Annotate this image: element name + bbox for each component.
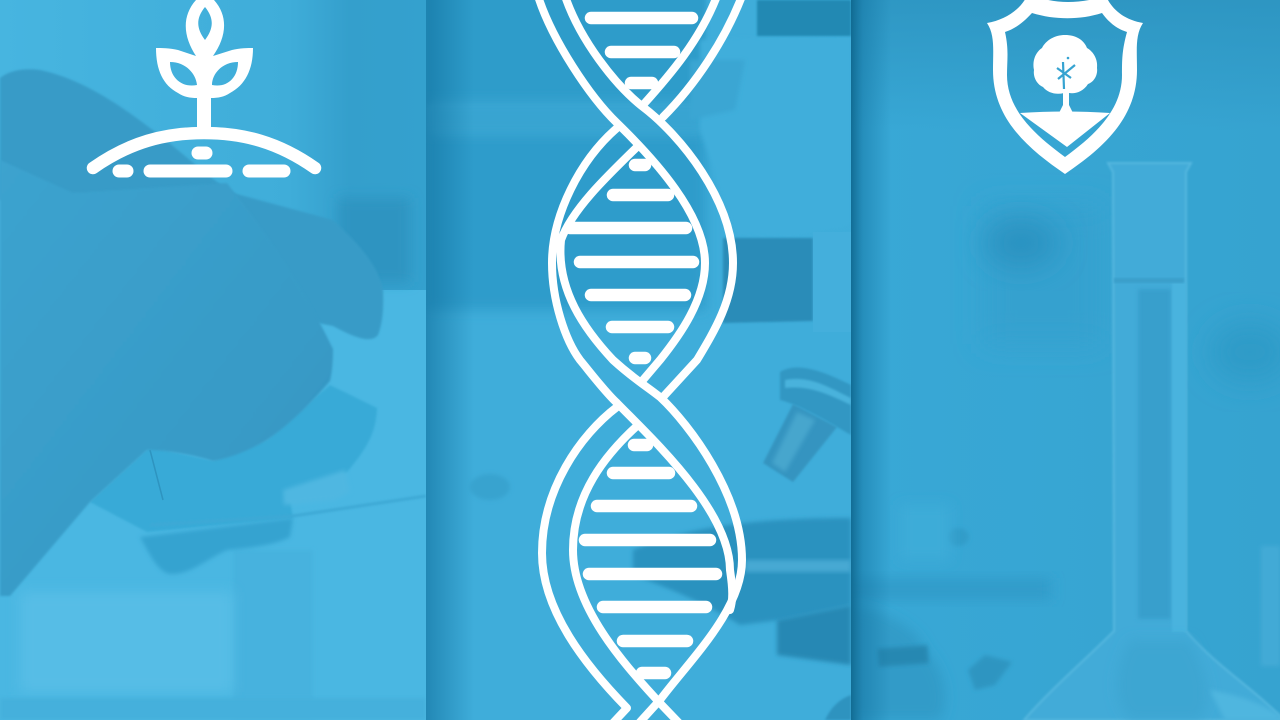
objective lens (763, 404, 837, 482)
tree trunk (1059, 90, 1073, 113)
panel: right flask photo (851, 0, 1280, 720)
small tube (1261, 546, 1280, 666)
DNA strand A upper (538, 0, 733, 397)
icon: DNA double helix (538, 0, 742, 720)
tree branches (1057, 62, 1075, 89)
DNA strand B middle (552, 128, 742, 720)
lower-left lab bench and hand (874, 581, 1044, 597)
shield outline (987, 0, 1143, 174)
dish highlight (283, 470, 350, 505)
main gloved hand (0, 160, 333, 596)
icon: plant sprout on soil (93, 0, 315, 171)
DNA strand A lower (542, 407, 680, 720)
microscope body (700, 40, 711, 146)
left edge shadow (851, 0, 882, 720)
left edge shadow (426, 0, 464, 720)
soil dashes (119, 153, 284, 171)
tree crown (1033, 35, 1097, 94)
plant leaves and stem (156, 0, 253, 127)
dish and lower fingers (90, 385, 377, 532)
panel: left gloved hand photo (0, 0, 426, 720)
ground (1020, 112, 1110, 147)
panel: middle microscope photo (426, 0, 851, 720)
DNA strand B upper segments (643, 0, 742, 117)
volumetric flask (1024, 163, 1280, 720)
icon: shield with tree (987, 0, 1143, 174)
microscope stage (633, 518, 851, 625)
soil arc (93, 133, 315, 168)
objective rings (780, 368, 851, 435)
back finger (0, 69, 383, 339)
DNA rungs (570, 18, 716, 673)
